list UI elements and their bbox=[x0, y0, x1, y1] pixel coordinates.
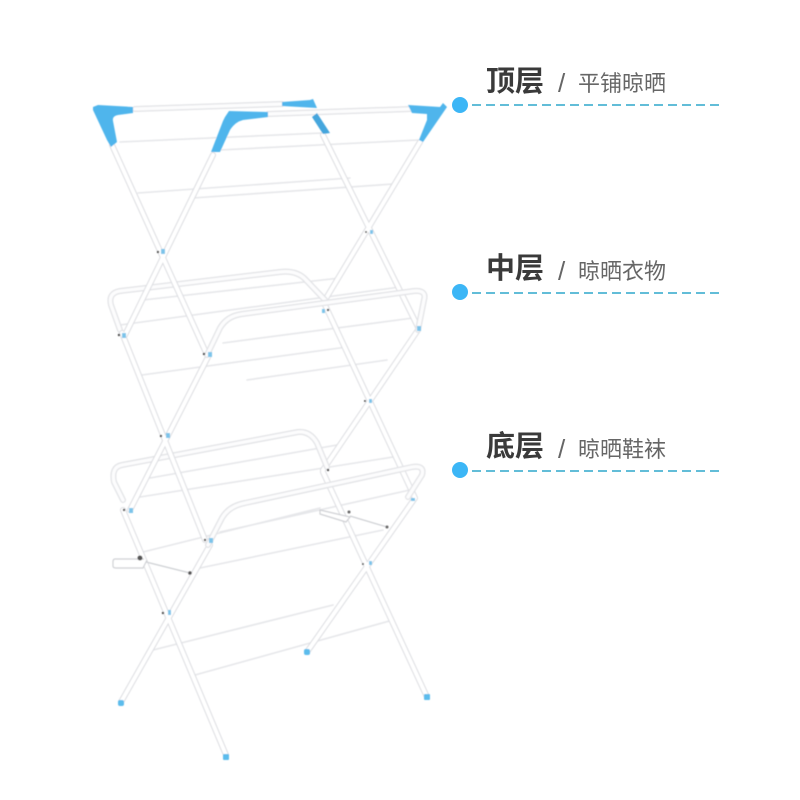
callout: middle tier bbox=[452, 252, 720, 300]
blue plastic corner: right bbox=[408, 103, 447, 142]
drying rack illustration bbox=[93, 99, 447, 760]
slash: bottom tier: / bbox=[558, 434, 566, 464]
description: top tier: 平铺晾晒 bbox=[578, 71, 666, 96]
back X legs bbox=[307, 135, 427, 697]
callout: bottom tier bbox=[452, 430, 720, 478]
description: middle tier: 晾晒衣物 bbox=[578, 259, 666, 284]
pivot joints bbox=[118, 230, 421, 615]
heading: top tier: 顶层 bbox=[486, 66, 544, 98]
thin hanging rods bbox=[120, 133, 418, 675]
right handle bbox=[320, 510, 388, 528]
front X legs bbox=[112, 145, 226, 755]
heading: bottom tier: 底层 bbox=[486, 430, 544, 463]
front foldable frames bbox=[207, 291, 425, 545]
blue plastic corner: front left bbox=[93, 105, 133, 147]
callout dashed line bbox=[472, 292, 720, 294]
blue leg tips bbox=[118, 649, 430, 760]
slash: top tier: / bbox=[558, 68, 566, 98]
callout dot bbox=[452, 284, 468, 300]
blue plastic corner: back centre bbox=[282, 99, 330, 134]
description: bottom tier: 晾晒鞋袜 bbox=[578, 437, 666, 462]
heading: middle tier: 中层 bbox=[486, 252, 544, 285]
callout dot bbox=[452, 462, 468, 478]
blue plastic corner: front centre bbox=[211, 111, 268, 152]
callout: top tier bbox=[452, 66, 720, 113]
back foldable frames bbox=[110, 272, 327, 500]
callout dashed line bbox=[472, 470, 720, 472]
callout dot bbox=[452, 97, 468, 113]
top rails bbox=[135, 104, 410, 114]
slash: middle tier: / bbox=[558, 256, 566, 286]
callout dashed line bbox=[472, 104, 720, 106]
left handle bbox=[113, 556, 192, 575]
